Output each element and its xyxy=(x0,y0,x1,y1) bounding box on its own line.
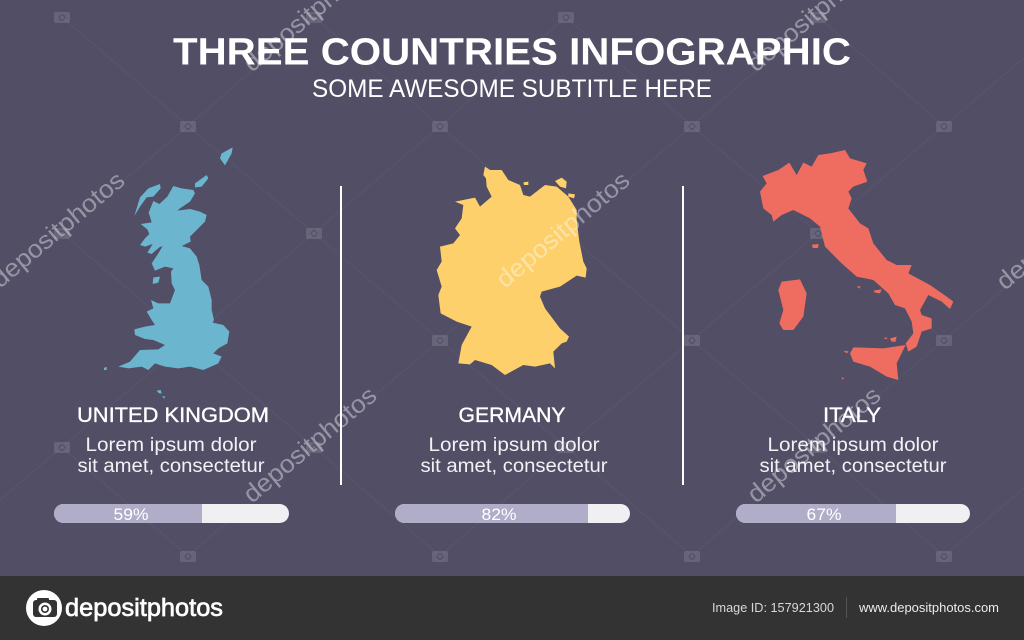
label: italy: ITALY xyxy=(823,404,881,427)
progress bar: 67% xyxy=(736,504,970,524)
progress bar: 59% xyxy=(54,504,289,524)
description: united kingdom: Lorem ipsum dolor xyxy=(86,435,257,456)
progress bar: 82%: 82% xyxy=(482,505,516,524)
panel: italy xyxy=(736,150,970,524)
watermark text: depositphotos xyxy=(742,381,886,509)
watermark camera icons xyxy=(54,12,952,562)
footer logo wordmark: depositphotos xyxy=(65,594,223,622)
map: germany xyxy=(437,167,587,375)
watermark text: depositphotos xyxy=(238,381,382,509)
progress bar: 67%: 67% xyxy=(806,505,842,524)
label: germany: GERMANY xyxy=(458,404,566,427)
progress bar: 82% xyxy=(395,504,630,524)
label: united kingdom: UNITED KINGDOM xyxy=(77,404,269,427)
description: united kingdom: sit amet, consectetur xyxy=(78,456,265,477)
watermark text xyxy=(0,0,1024,509)
icon: depositphotos camera logo xyxy=(26,590,62,626)
progress bar: 59%: 59% xyxy=(114,505,148,524)
panel: germany xyxy=(395,167,630,524)
map: italy xyxy=(760,150,953,380)
description: germany: Lorem ipsum dolor xyxy=(428,435,600,456)
description: italy: sit amet, consectetur xyxy=(760,456,947,477)
title: THREE COUNTRIES INFOGRAPHIC xyxy=(173,32,851,74)
divider xyxy=(682,186,684,485)
subtitle: SOME AWESOME SUBTITLE HERE xyxy=(312,75,712,103)
image id: Image ID: 157921300 xyxy=(712,601,834,615)
panel: united kingdom xyxy=(54,147,289,524)
website: www.depositphotos.com xyxy=(858,601,999,615)
description: italy: Lorem ipsum dolor xyxy=(768,435,939,456)
watermark text: depositphotos xyxy=(491,166,635,294)
footer bar xyxy=(0,576,1024,640)
map: united kingdom xyxy=(104,147,233,399)
divider xyxy=(340,186,342,485)
description: germany: sit amet, consectetur xyxy=(420,456,608,477)
